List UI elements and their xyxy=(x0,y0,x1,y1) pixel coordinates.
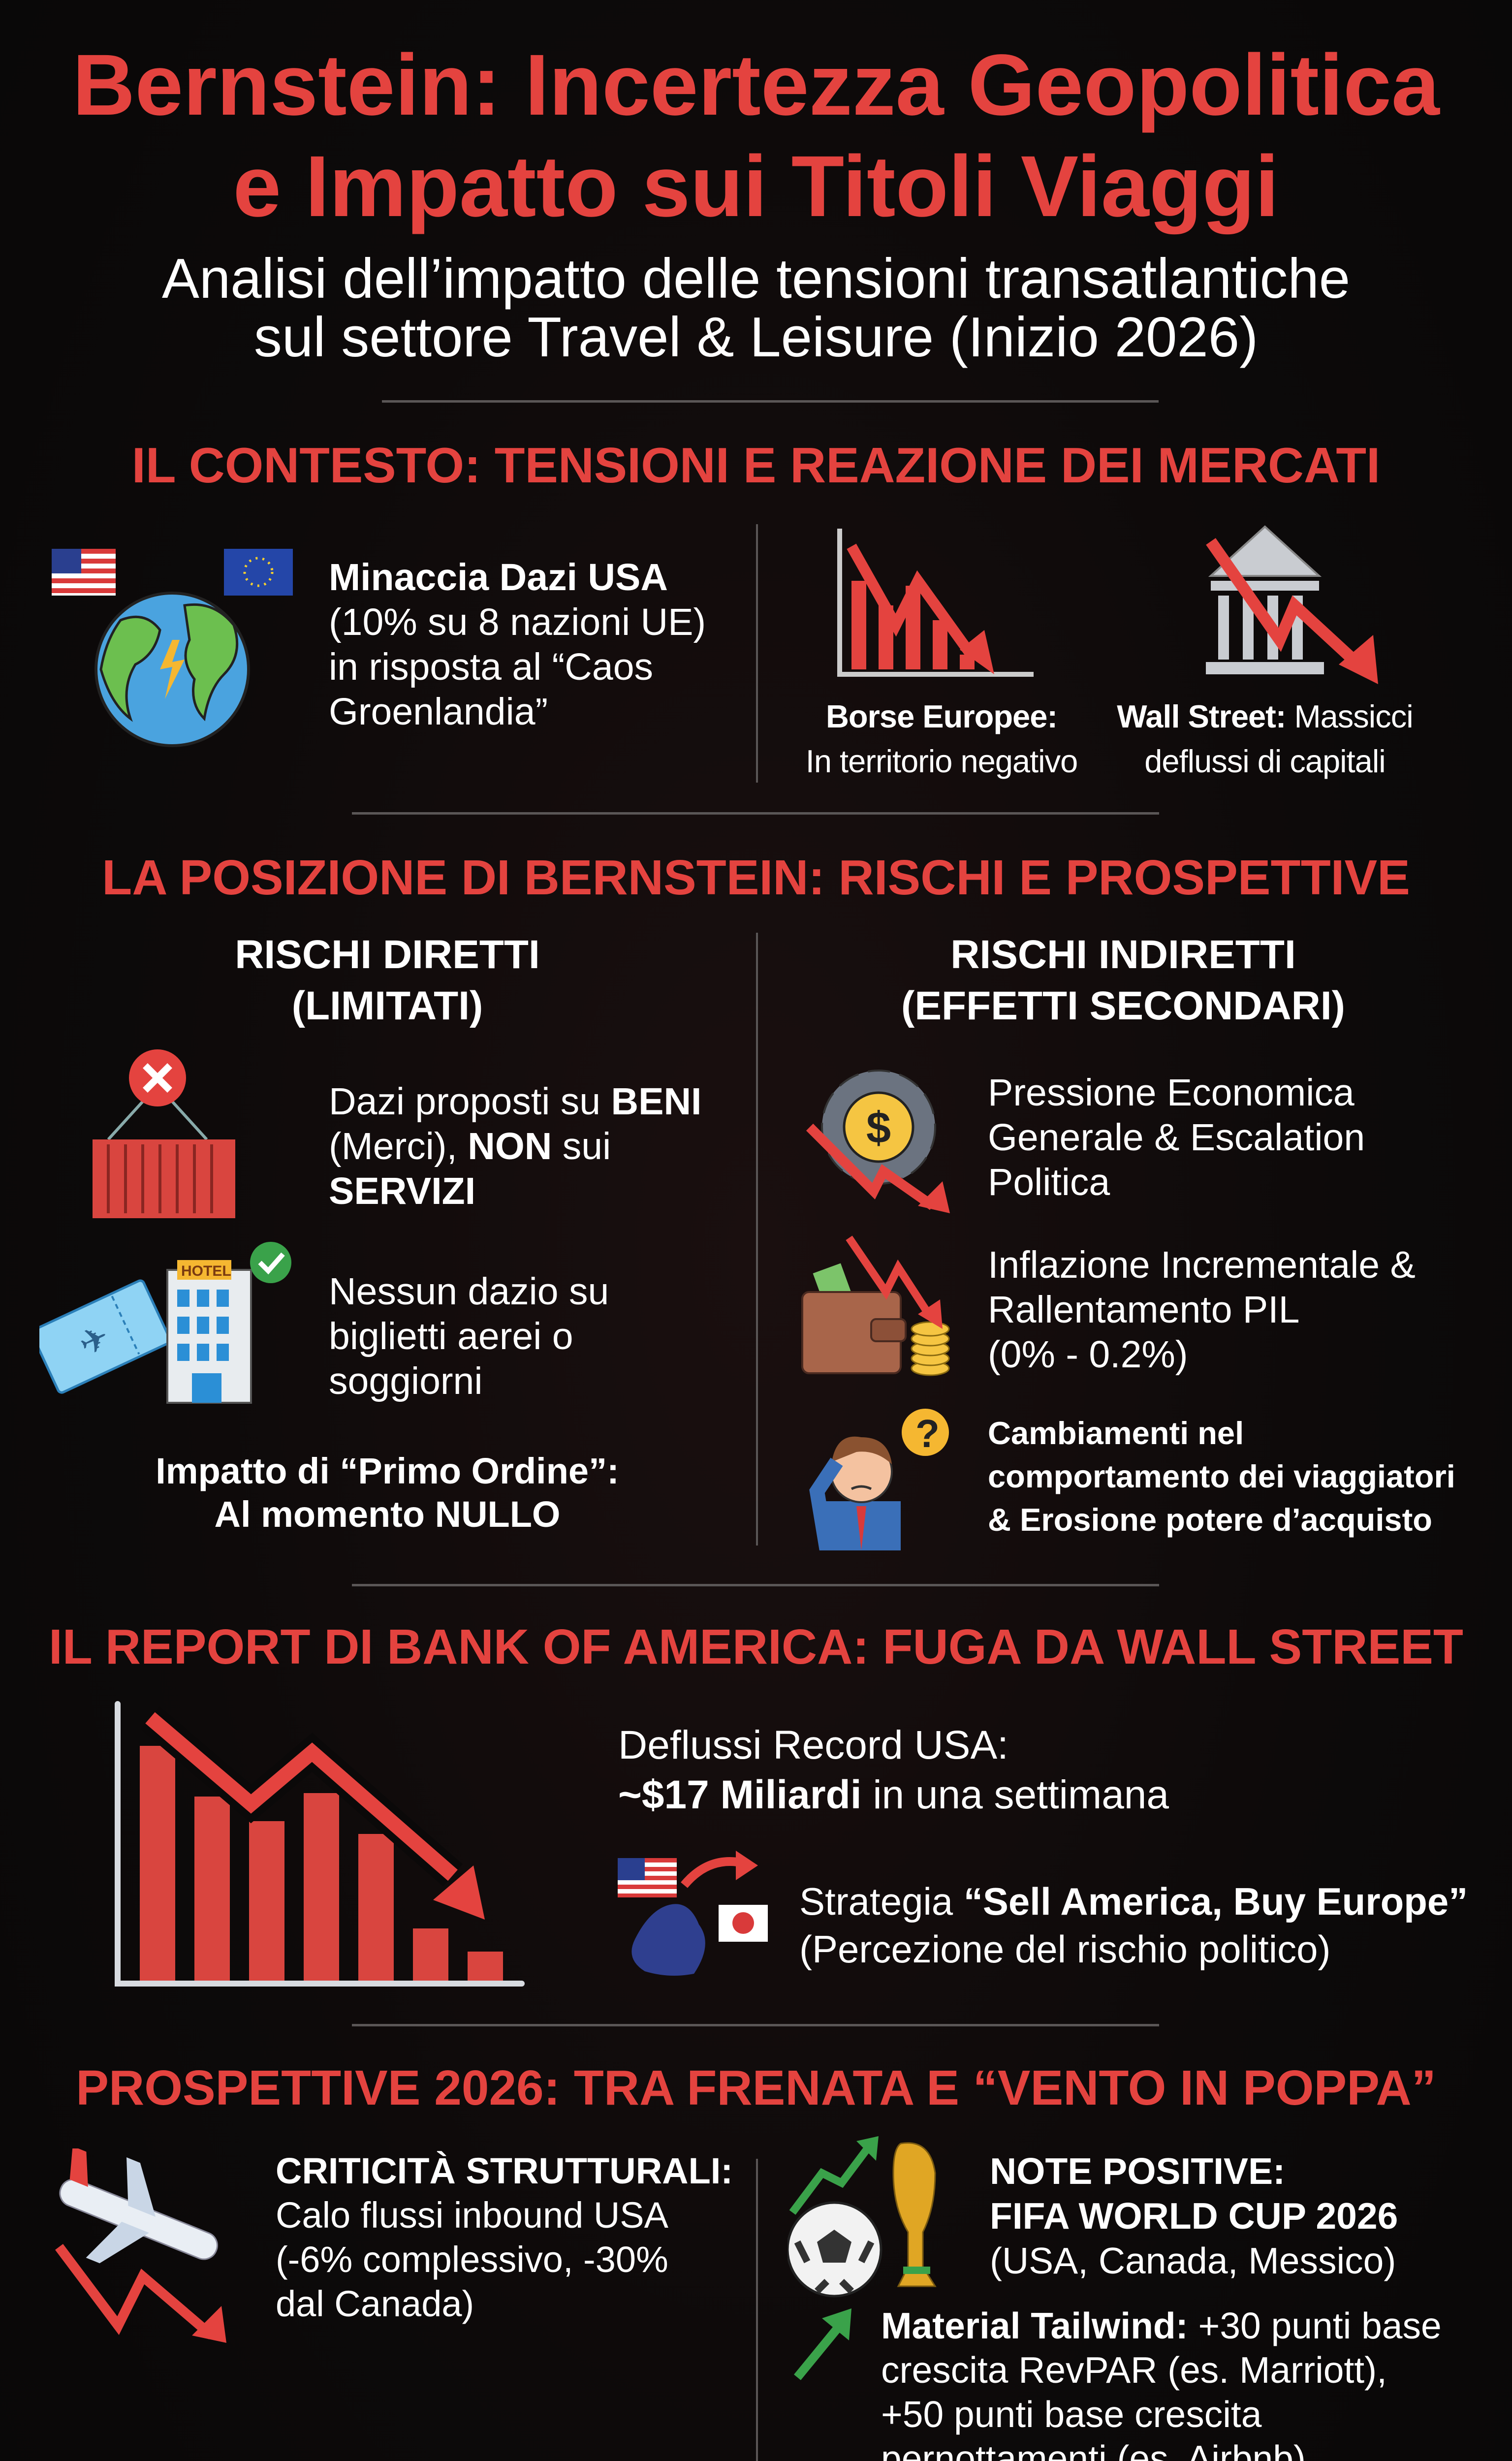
icon: globe with flags xyxy=(52,549,293,747)
icon: gear with dollar: $ xyxy=(866,1104,891,1153)
text: borse europee: In territorio negativo xyxy=(806,743,1077,779)
heading: bank of america: IL REPORT DI BANK OF AMERICA: FUGA DA WALL STREET xyxy=(49,1619,1463,1674)
text: borse europee: Borse Europee: xyxy=(826,698,1057,734)
text: pressione economica: Pressione Economica xyxy=(988,1072,1354,1114)
text: criticita strutturali: CRITICITÀ STRUTTURALI: xyxy=(276,2150,733,2191)
subtitle xyxy=(162,248,1350,369)
icon: gear with dollar xyxy=(805,1058,962,1216)
text: impatto primo ordine xyxy=(117,1450,658,1536)
subheading: rischi indiretti: RISCHI INDIRETTI xyxy=(950,932,1296,977)
text: dazi su beni: Dazi proposti su BENI xyxy=(329,1080,701,1123)
title: Bernstein: Incertezza Geopolitica xyxy=(72,37,1440,133)
text: criticita strutturali: (-6% complessivo, -30% xyxy=(276,2239,668,2280)
text: dazi su beni: SERVIZI xyxy=(329,1170,475,1212)
text: cambiamenti xyxy=(988,1412,1455,1542)
icon: container with X xyxy=(93,1049,235,1218)
subheading: rischi diretti xyxy=(235,932,540,1028)
text: wall street: Wall Street: Massicci xyxy=(1117,698,1413,734)
text: note positive: NOTE POSITIVE: xyxy=(990,2150,1285,2192)
text: deflussi record: Deflussi Record USA: xyxy=(618,1723,1008,1767)
text: minaccia dazi xyxy=(329,556,706,733)
text: note positive xyxy=(990,2149,1398,2283)
icon: wallet with coins xyxy=(797,1233,960,1381)
text: inflazione: Inflazione Incrementale & xyxy=(988,1244,1416,1286)
text: borse europee xyxy=(806,698,1077,779)
icon: european bourse chart down xyxy=(837,529,1034,677)
text: inflazione: (0% - 0.2%) xyxy=(988,1333,1188,1376)
icon: wall street bank with arrow xyxy=(1206,525,1378,684)
text: note positive: (USA, Canada, Messico) xyxy=(990,2240,1396,2281)
text: minaccia dazi: in risposta al “Caos xyxy=(329,646,653,688)
text: nessun dazio: biglietti aerei o xyxy=(329,1315,573,1357)
text: note positive: FIFA WORLD CUP 2026 xyxy=(990,2195,1398,2237)
subheading: rischi indiretti xyxy=(901,932,1345,1028)
text: criticita strutturali: dal Canada) xyxy=(276,2283,474,2324)
icon: usa to europe xyxy=(615,1851,783,1984)
text: impatto primo ordine: Al momento NULLO xyxy=(215,1494,560,1535)
title xyxy=(72,37,1440,235)
subheading: rischi diretti: RISCHI DIRETTI xyxy=(235,932,540,977)
text: cambiamenti: Cambiamenti nel xyxy=(988,1415,1244,1451)
text: material tailwind: Material Tailwind: +30 punti base xyxy=(881,2305,1442,2346)
text: nessun dazio: Nessun dazio su xyxy=(329,1270,609,1313)
text: sell america buy europe: (Percezione del rischio politico) xyxy=(799,1927,1330,1971)
text: cambiamenti: & Erosione potere d’acquisto xyxy=(988,1502,1432,1538)
text: pressione economica xyxy=(988,1071,1365,1205)
text: criticita strutturali: Calo flussi inbound USA xyxy=(276,2195,668,2236)
text: cambiamenti: comportamento dei viaggiatori xyxy=(988,1458,1455,1494)
icon: ticket and hotel xyxy=(39,1242,291,1404)
text: deflussi record xyxy=(618,1720,1169,1820)
subtitle: Analisi dell’impatto delle tensioni transatlantiche xyxy=(162,248,1350,310)
icon: ticket and hotel: HOTEL xyxy=(181,1263,231,1279)
icon: plane with down arrow xyxy=(44,2148,241,2345)
subtitle: sul settore Travel & Leisure (Inizio 2026) xyxy=(254,306,1258,369)
bar chart: outflows xyxy=(111,1701,529,1991)
text: material tailwind: +50 punti base crescita xyxy=(881,2394,1261,2435)
text: material tailwind xyxy=(881,2303,1442,2461)
icon: ticket and hotel: ✈ xyxy=(72,1316,116,1365)
icon: green up arrow xyxy=(792,2303,861,2382)
heading: il contesto: IL CONTESTO: TENSIONI E REAZIONE DEI MERCATI xyxy=(132,438,1380,493)
text: impatto primo ordine: Impatto di “Primo Ordine”: xyxy=(156,1451,619,1491)
text: pressione economica: Generale & Escalation xyxy=(988,1116,1365,1159)
text: nessun dazio: soggiorni xyxy=(329,1360,482,1402)
icon: worried traveller: ? xyxy=(915,1412,940,1455)
icon: worried traveller xyxy=(797,1403,960,1550)
text: sell america buy europe xyxy=(799,1878,1468,1973)
text: minaccia dazi: Minaccia Dazi USA xyxy=(329,556,668,599)
text: inflazione xyxy=(988,1243,1416,1377)
text: minaccia dazi: Groenlandia” xyxy=(329,691,548,733)
title: e Impatto sui Titoli Viaggi xyxy=(233,138,1279,235)
text: wall street: deflussi di capitali xyxy=(1144,743,1386,779)
text: criticita strutturali xyxy=(276,2149,733,2326)
text: material tailwind: crescita RevPAR (es. Marriott), xyxy=(881,2349,1387,2391)
subheading: rischi diretti: (LIMITATI) xyxy=(292,983,483,1028)
text: nessun dazio xyxy=(329,1269,609,1404)
heading: prospettive 2026: PROSPETTIVE 2026: TRA FRENATA E “VENTO IN POPPA” xyxy=(76,2060,1436,2115)
text: deflussi record: ~$17 Miliardi in una settimana xyxy=(618,1772,1169,1817)
subheading: rischi indiretti: (EFFETTI SECONDARI) xyxy=(901,983,1345,1028)
icon: football and trophy xyxy=(788,2134,965,2299)
text: sell america buy europe: Strategia “Sell America, Buy Europe” xyxy=(799,1880,1468,1923)
text: wall street xyxy=(1117,698,1413,779)
heading: posizione bernstein: LA POSIZIONE DI BERNSTEIN: RISCHI E PROSPETTIVE xyxy=(102,850,1410,905)
text: dazi su beni xyxy=(329,1080,701,1212)
text: dazi su beni: (Merci), NON sui xyxy=(329,1125,611,1167)
text: pressione economica: Politica xyxy=(988,1161,1110,1203)
text: minaccia dazi: (10% su 8 nazioni UE) xyxy=(329,601,706,643)
text: inflazione: Rallentamento PIL xyxy=(988,1289,1299,1331)
